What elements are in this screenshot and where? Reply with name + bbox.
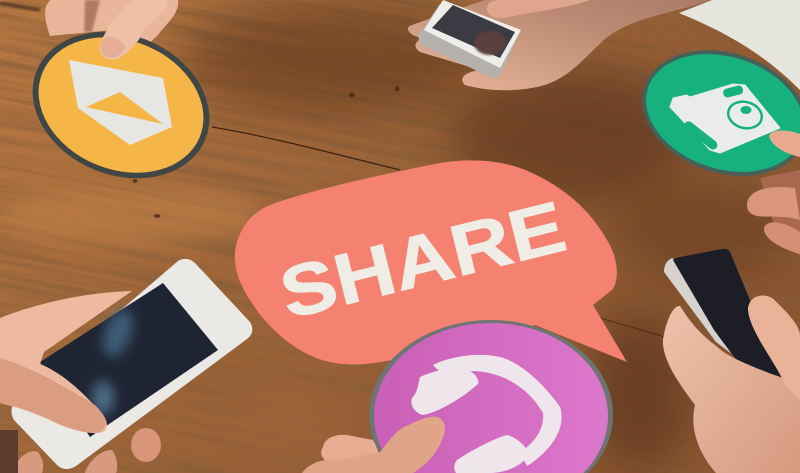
bubble label: SHARE: SHARE <box>273 187 573 335</box>
icon: camera <box>670 84 780 153</box>
right hand holding black phone <box>663 249 800 473</box>
right hand holding green badge <box>747 130 800 255</box>
white paper corner <box>679 0 800 90</box>
hand holding top phone <box>408 0 710 90</box>
left hand fingers behind white phone <box>0 428 161 473</box>
speech bubble <box>235 160 627 364</box>
black phone <box>664 249 782 377</box>
bottom centre hand holding pink badge <box>302 417 445 473</box>
phone screen <box>40 283 218 437</box>
top white phone <box>418 0 521 78</box>
icon: headset <box>411 355 562 473</box>
icon: pentagon with triangle <box>69 60 172 145</box>
thumb on orange badge <box>100 0 168 60</box>
phone screen <box>432 5 515 58</box>
pink badge with headset icon <box>369 320 613 473</box>
left hand on white phone <box>0 291 132 433</box>
green badge with camera icon <box>626 30 800 196</box>
bottom-left white phone <box>11 259 252 469</box>
table crack <box>212 127 400 170</box>
hand holding orange badge <box>45 0 178 46</box>
orange badge with shape icon <box>10 0 232 204</box>
